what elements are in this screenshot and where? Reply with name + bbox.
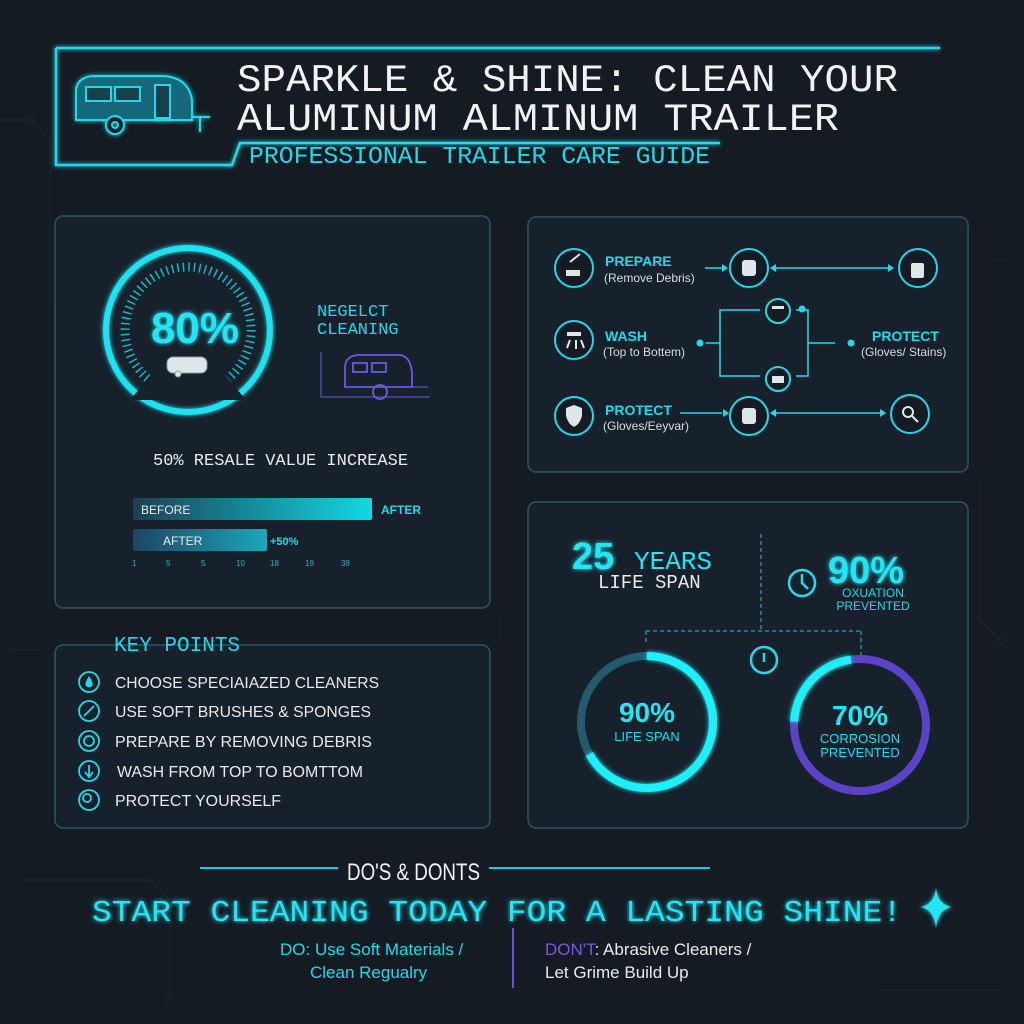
- header frame: ALUMINUM ALMINUM TRAILER: [237, 98, 839, 142]
- gauge: [106, 248, 270, 412]
- heading: do's and donts: DO'S & DONTS: [347, 859, 480, 886]
- ring: corrosion: 70%: [832, 700, 888, 731]
- dont text: [545, 940, 752, 982]
- panel: gauge and resale: [55, 216, 490, 608]
- panel: process flow: [528, 217, 968, 472]
- call to action: START CLEANING TODAY FOR A LASTING SHINE!: [92, 896, 902, 931]
- panel: process flow: PROTECT: [872, 328, 939, 344]
- icon: trailer: [76, 76, 210, 134]
- dont text: DON'T: Abrasive Cleaners /: [545, 940, 752, 959]
- ring: corrosion: PREVENTED: [820, 745, 900, 760]
- panel: key points: USE SOFT BRUSHES & SPONGES: [115, 704, 371, 721]
- bar chart: BEFORE: [141, 503, 190, 517]
- ring: life span: [581, 656, 713, 788]
- bar chart: +50%: [270, 536, 299, 548]
- panel: process flow: PROTECT: [605, 402, 672, 418]
- bar chart: 38: [341, 559, 350, 568]
- gauge: 80%: [151, 304, 239, 353]
- panel: stats: [528, 502, 968, 828]
- bar chart: 19: [305, 559, 314, 568]
- do text: [280, 940, 464, 982]
- title: SPARKLE & SHINE: CLEAN YOUR: [237, 59, 898, 103]
- do text: DO: Use Soft Materials /: [280, 940, 464, 959]
- panel: key points: PREPARE BY REMOVING DEBRIS: [115, 734, 372, 751]
- bar chart: AFTER: [381, 503, 421, 517]
- do text: Clean Regualry: [310, 963, 428, 982]
- neglect text: NEGELCT: [317, 303, 388, 322]
- panel: key points: WASH FROM TOP TO BOMTTOM: [117, 764, 363, 781]
- panel: process flow: WASH: [605, 328, 647, 344]
- subtitle: PROFESSIONAL TRAILER CARE GUIDE: [249, 144, 710, 171]
- panel: stats: OXUATION: [842, 586, 904, 600]
- panel: process flow: PREPARE: [605, 253, 672, 269]
- panel: stats: 90%: [828, 550, 904, 592]
- bar chart: 10: [236, 559, 245, 568]
- bar chart: 1: [132, 559, 137, 568]
- panel: process flow: (Remove Debris): [604, 271, 695, 285]
- bar chart: 5: [201, 559, 206, 568]
- ring: life span: 90%: [619, 697, 675, 728]
- panel: key points: CHOOSE SPECIAIAZED CLEANERS: [115, 675, 379, 692]
- dont text: Let Grime Build Up: [545, 963, 689, 982]
- ring: corrosion: CORROSION: [820, 731, 900, 746]
- panel: gauge and resale: 50% RESALE VALUE INCREASE: [153, 452, 408, 471]
- panel: gauge and resale: CLEANING: [317, 321, 399, 340]
- panel: stats: 25: [572, 536, 614, 578]
- panel: stats: LIFE SPAN: [598, 572, 701, 594]
- bar chart: 5: [166, 559, 171, 568]
- panel: key points: PROTECT YOURSELF: [115, 793, 281, 810]
- icon: neglect trailer: [321, 352, 430, 399]
- bar chart: 18: [270, 559, 279, 568]
- bar chart: [132, 498, 421, 568]
- panel: process flow: (Gloves/Eeyvar): [603, 419, 689, 433]
- ring: corrosion: [791, 656, 929, 794]
- panel: process flow: (Gloves/ Stains): [861, 345, 946, 359]
- panel: stats: YEARS: [634, 547, 712, 577]
- bar chart: AFTER: [163, 534, 203, 548]
- header frame: [56, 48, 940, 171]
- icon: clock: [789, 570, 815, 596]
- panel: key points: [55, 635, 490, 828]
- panel: stats: PREVENTED: [836, 599, 910, 613]
- heading: key points: KEY POINTS: [114, 635, 240, 658]
- icon: sparkle: [920, 888, 952, 928]
- panel: process flow: (Top to Bottem): [603, 345, 685, 359]
- ring: life span: LIFE SPAN: [614, 729, 680, 744]
